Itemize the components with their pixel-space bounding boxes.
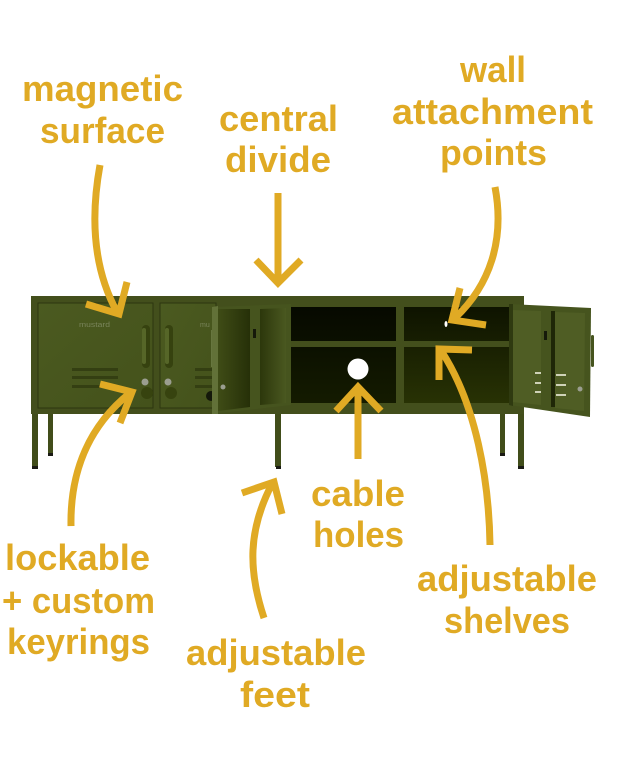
cable hole	[348, 358, 368, 380]
cabinet legs	[32, 414, 524, 469]
door handle	[142, 325, 150, 368]
arrow: lockable keyrings	[71, 384, 132, 526]
label: magnetic surface: surface	[40, 110, 165, 151]
label: lockable + custom keyrings: keyrings	[7, 621, 150, 662]
label: adjustable feet: feet	[240, 674, 310, 715]
closed door: second	[160, 303, 216, 408]
label: wall attachment points: points	[440, 132, 547, 173]
interior: left bay	[288, 303, 396, 408]
wall attachment hole	[444, 321, 448, 327]
locker cabinet	[31, 296, 594, 469]
closed door: left	[38, 303, 153, 408]
interior: right bay	[404, 307, 510, 403]
label: adjustable shelves: adjustable	[417, 558, 597, 599]
label: cable holes	[311, 473, 405, 555]
label: cable holes: holes	[313, 514, 404, 555]
label: wall attachment points: attachment	[392, 91, 593, 132]
open door: right	[509, 304, 594, 417]
label: magnetic surface: magnetic	[22, 68, 183, 109]
label: cable holes: cable	[311, 473, 405, 514]
arrow: wall attachment points	[452, 187, 498, 325]
door vents	[535, 372, 566, 396]
label: adjustable feet	[186, 632, 366, 715]
label: central divide: central	[219, 98, 338, 139]
label: magnetic surface	[22, 68, 183, 151]
label: adjustable shelves: shelves	[444, 600, 570, 641]
open door: left	[212, 304, 291, 414]
label: lockable + custom keyrings: lockable	[5, 537, 150, 578]
label: central divide	[219, 98, 338, 180]
brand mark: mustard	[79, 322, 110, 329]
arrow: cable holes	[336, 387, 381, 459]
label: lockable + custom keyrings: + custom	[2, 580, 155, 621]
closed door: second: mu	[200, 322, 210, 329]
label: central divide: divide	[225, 139, 331, 180]
arrow: central divide	[256, 193, 301, 283]
label: adjustable feet: adjustable	[186, 632, 366, 673]
label: wall attachment points: wall	[459, 49, 526, 90]
label: adjustable shelves	[417, 558, 597, 641]
cabinet body	[31, 296, 524, 414]
label: lockable + custom keyrings	[2, 537, 155, 662]
arrow: magnetic surface	[86, 165, 127, 314]
central divide	[396, 303, 404, 411]
arrow: adjustable feet	[242, 482, 282, 618]
vents	[72, 368, 118, 388]
lock	[142, 378, 148, 386]
arrow: adjustable shelves	[439, 349, 490, 545]
label: wall attachment points	[392, 49, 593, 173]
